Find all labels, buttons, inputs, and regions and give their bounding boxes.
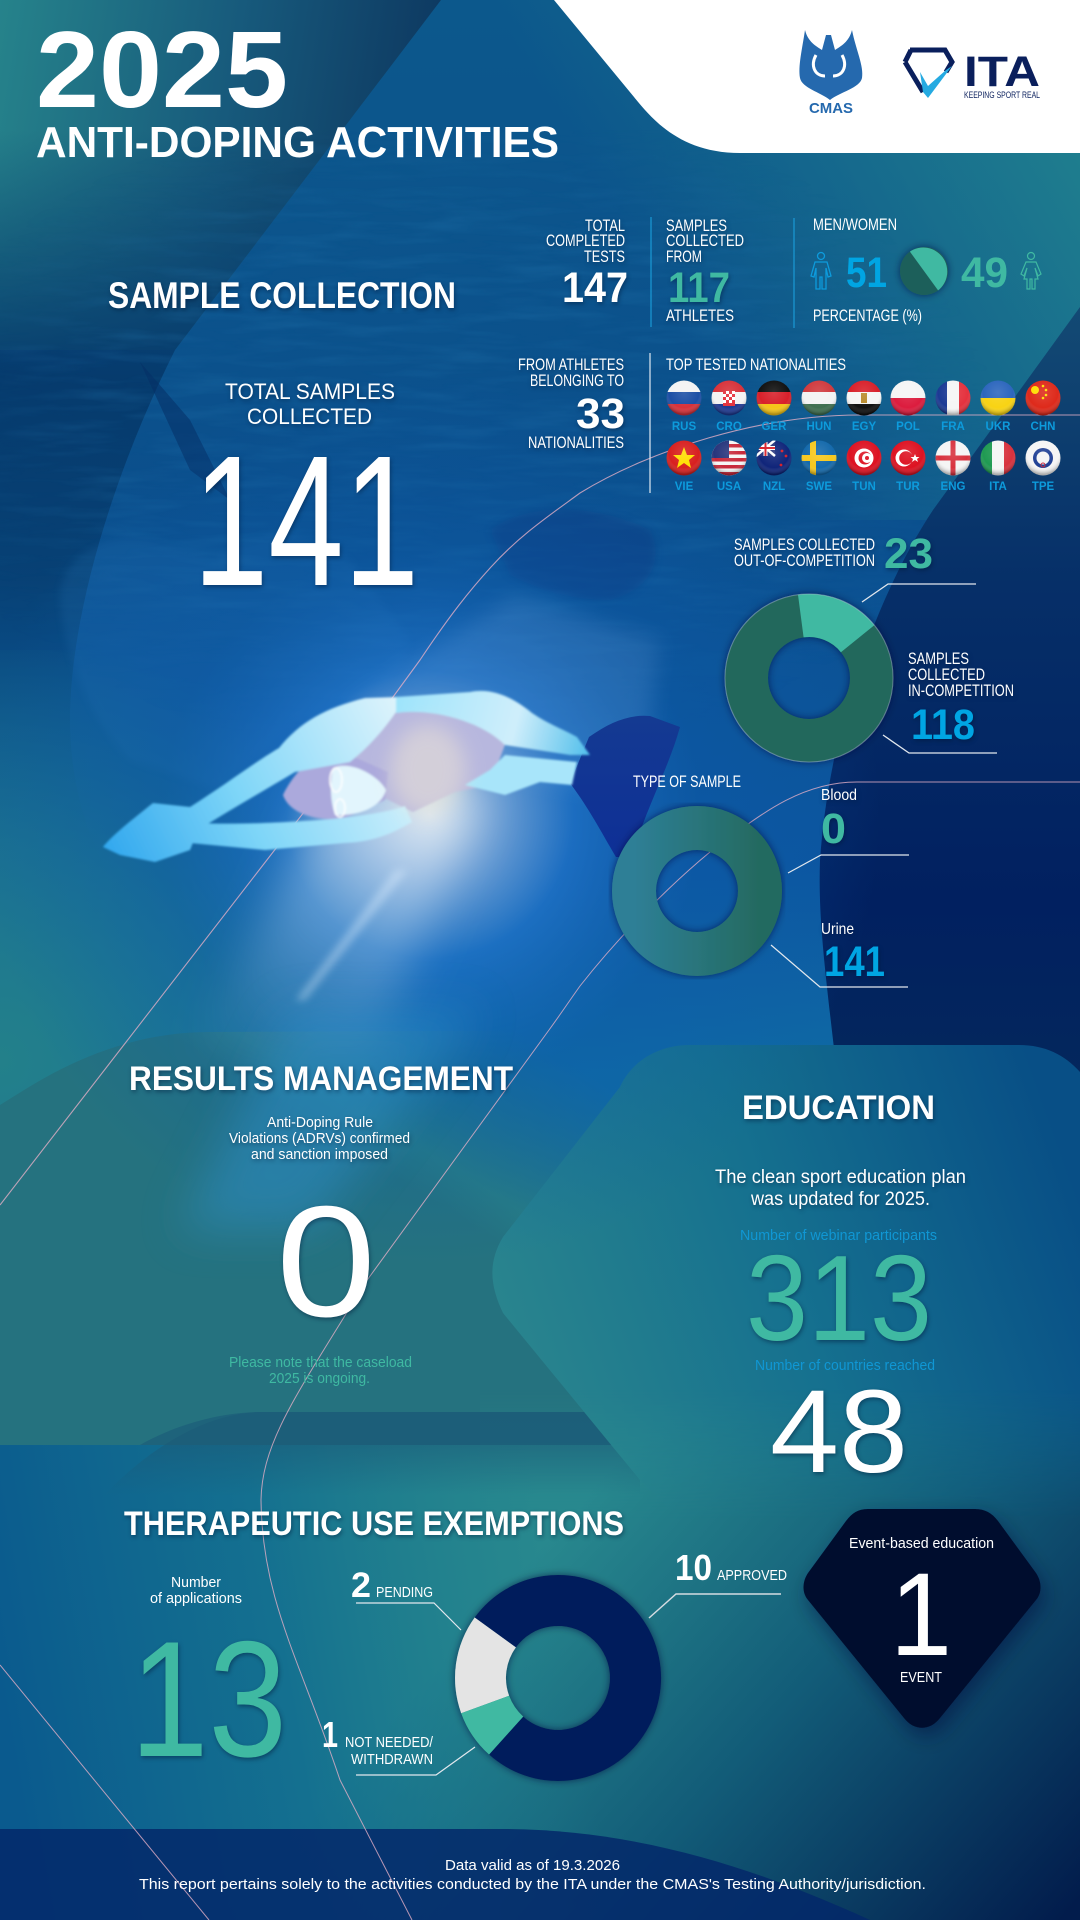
stat: men and women percentage: 49	[961, 249, 1008, 297]
label: approved: APPROVED	[717, 1567, 787, 1584]
icon: man	[811, 252, 831, 289]
note: 2025 is ongoing.	[269, 1370, 370, 1387]
stat: nationalities: BELONGING TO	[530, 372, 624, 390]
description: Anti-Doping Rule	[267, 1114, 373, 1131]
label: not needed or withdrawn: NOT NEEDED/	[345, 1734, 434, 1751]
label: out of competition: OUT-OF-COMPETITION	[734, 552, 875, 570]
flags: top tested nationalities: TPE	[1032, 481, 1055, 493]
flags: top tested nationalities: CHN	[1031, 421, 1055, 433]
panel: education: 48	[770, 1366, 908, 1498]
flags: top tested nationalities: TOP TESTED NATIONALITIES	[666, 356, 846, 374]
stat: men and women percentage: MEN/WOMEN	[813, 216, 897, 234]
flags: top tested nationalities: ENG	[941, 481, 966, 493]
flags: top tested nationalities: TUR	[896, 481, 921, 493]
flags: top tested nationalities: SWE	[806, 481, 832, 493]
label: urine	[821, 921, 885, 986]
panel: education: EDUCATION	[742, 1089, 935, 1127]
stat: samples collected from athletes: SAMPLES	[666, 217, 727, 235]
stat: samples collected from athletes: 117	[668, 264, 730, 312]
stat: nationalities	[518, 356, 625, 452]
label: blood: Blood	[821, 787, 857, 804]
stat: samples collected from athletes	[666, 217, 744, 325]
label: not needed or withdrawn: 1	[322, 1714, 338, 1755]
education plan text: was updated for 2025.	[750, 1189, 930, 1210]
footer: Data valid as of 19.3.2026	[445, 1857, 620, 1874]
logo: ITA	[905, 48, 1040, 100]
label: urine: 141	[824, 938, 885, 986]
label: in competition: COLLECTED	[908, 666, 985, 684]
description: and sanction imposed	[251, 1146, 388, 1163]
stat: nationalities: 33	[576, 390, 625, 438]
panel: education: Number of countries reached	[755, 1357, 935, 1374]
stat: total completed tests: TESTS	[584, 248, 625, 266]
stat: total samples collected: TOTAL SAMPLES	[225, 379, 395, 404]
stat: men and women percentage: PERCENTAGE (%)	[813, 307, 922, 325]
flags: top tested nationalities: USA	[717, 481, 741, 493]
label: in competition	[908, 650, 1014, 749]
number of applications: of applications	[150, 1590, 242, 1607]
donut: in and out of competition	[725, 530, 1014, 762]
label: pending	[351, 1566, 433, 1605]
description	[229, 1114, 410, 1163]
note: Please note that the caseload	[229, 1354, 412, 1371]
flags: top tested nationalities: TUN	[852, 481, 876, 493]
donut: TUE outcomes	[455, 1575, 661, 1781]
title	[36, 9, 559, 167]
title: 2025	[36, 9, 288, 131]
panel: results management: 0	[276, 1174, 376, 1350]
education plan text: The clean sport education plan	[715, 1167, 966, 1188]
label: pending: 2	[351, 1566, 371, 1605]
panel: event-based education	[804, 1509, 1040, 1728]
flags: top tested nationalities: ITA	[989, 481, 1007, 493]
flags: top tested nationalities: FRA	[941, 421, 965, 433]
stat: men and women percentage: 51	[846, 249, 887, 297]
label: blood: 0	[821, 805, 846, 853]
flags: top tested nationalities: CRO	[716, 421, 742, 433]
note	[229, 1354, 412, 1387]
icon: woman	[1021, 252, 1041, 289]
stat: nationalities: NATIONALITIES	[528, 434, 624, 452]
logo: ITA: ITA	[964, 48, 1040, 96]
flags: top tested nationalities: RUS	[672, 421, 696, 433]
panel: event-based education: 1	[890, 1549, 952, 1681]
stat: total samples collected: 141	[193, 418, 419, 625]
flags: top tested nationalities: UKR	[986, 421, 1011, 433]
heading: sample collection: SAMPLE COLLECTION	[108, 275, 456, 316]
label: out of competition	[734, 530, 933, 578]
number of applications: Number	[171, 1574, 221, 1591]
flags: top tested nationalities: POL	[896, 421, 920, 433]
donut: type of sample	[633, 773, 909, 987]
panel: therapeutic use exemptions	[124, 1505, 787, 1791]
label: blood	[821, 787, 857, 853]
footer: This report pertains solely to the activities conducted by the ITA under the CMAS's Testing Authority/jurisdiction.	[139, 1876, 926, 1893]
number of applications: 13	[130, 1607, 287, 1791]
panel: education: Number of webinar participants	[740, 1227, 937, 1244]
label: not needed or withdrawn	[322, 1714, 434, 1768]
stat: nationalities: FROM ATHLETES	[518, 356, 624, 374]
panel: results management: RESULTS MANAGEMENT	[129, 1060, 513, 1098]
title: ANTI-DOPING ACTIVITIES	[36, 118, 559, 167]
panel: education	[715, 1089, 966, 1498]
label: not needed or withdrawn: WITHDRAWN	[351, 1751, 433, 1768]
flags: top tested nationalities	[666, 356, 1061, 493]
stat: total samples collected: COLLECTED	[247, 404, 372, 429]
flags: top tested nationalities: EGY	[852, 421, 876, 433]
panel: event-based education: Event-based education	[849, 1535, 994, 1552]
label: in competition: 118	[911, 701, 975, 749]
stat: total completed tests: COMPLETED	[546, 232, 625, 250]
label: pending: PENDING	[376, 1584, 433, 1601]
logo: CMAS	[799, 30, 862, 117]
header logo panel	[554, 0, 1080, 153]
stat: total completed tests	[546, 217, 628, 312]
label: approved: 10	[675, 1547, 712, 1588]
logo: CMAS: CMAS	[809, 100, 853, 117]
label: in competition: IN-COMPETITION	[908, 682, 1014, 700]
flags: top tested nationalities: VIE	[675, 481, 694, 493]
education plan text	[715, 1167, 966, 1210]
footer	[139, 1857, 926, 1893]
panel: education: 313	[746, 1230, 932, 1366]
donut: type of sample: TYPE OF SAMPLE	[633, 773, 741, 791]
flags: top tested nationalities: NZL	[763, 481, 785, 493]
stat: total completed tests: TOTAL	[585, 217, 625, 235]
flags: top tested nationalities: HUN	[807, 421, 831, 433]
label: approved	[675, 1547, 787, 1588]
stat: samples collected from athletes: ATHLETES	[666, 307, 734, 325]
stat: total completed tests: 147	[562, 264, 628, 312]
stat: men and women percentage	[811, 216, 1041, 325]
description: Violations (ADRVs) confirmed	[229, 1130, 410, 1147]
label: out of competition: SAMPLES COLLECTED	[734, 536, 875, 554]
panel: event-based education: EVENT	[900, 1669, 942, 1686]
flags: top tested nationalities: GER	[762, 421, 787, 433]
stat: samples collected from athletes: FROM	[666, 248, 702, 266]
logo: ITA: KEEPING SPORT REAL	[964, 90, 1040, 100]
swimmer illustration	[103, 691, 680, 862]
panel: results management	[129, 1060, 513, 1387]
stat: samples collected from athletes: COLLECTED	[666, 232, 744, 250]
label: out of competition: 23	[884, 530, 933, 578]
pie: men women split	[900, 247, 948, 295]
label: in competition: SAMPLES	[908, 650, 969, 668]
panel: therapeutic use exemptions: THERAPEUTIC USE EXEMPTIONS	[124, 1505, 624, 1543]
label: urine: Urine	[821, 921, 854, 938]
stat: total samples collected	[193, 379, 419, 625]
